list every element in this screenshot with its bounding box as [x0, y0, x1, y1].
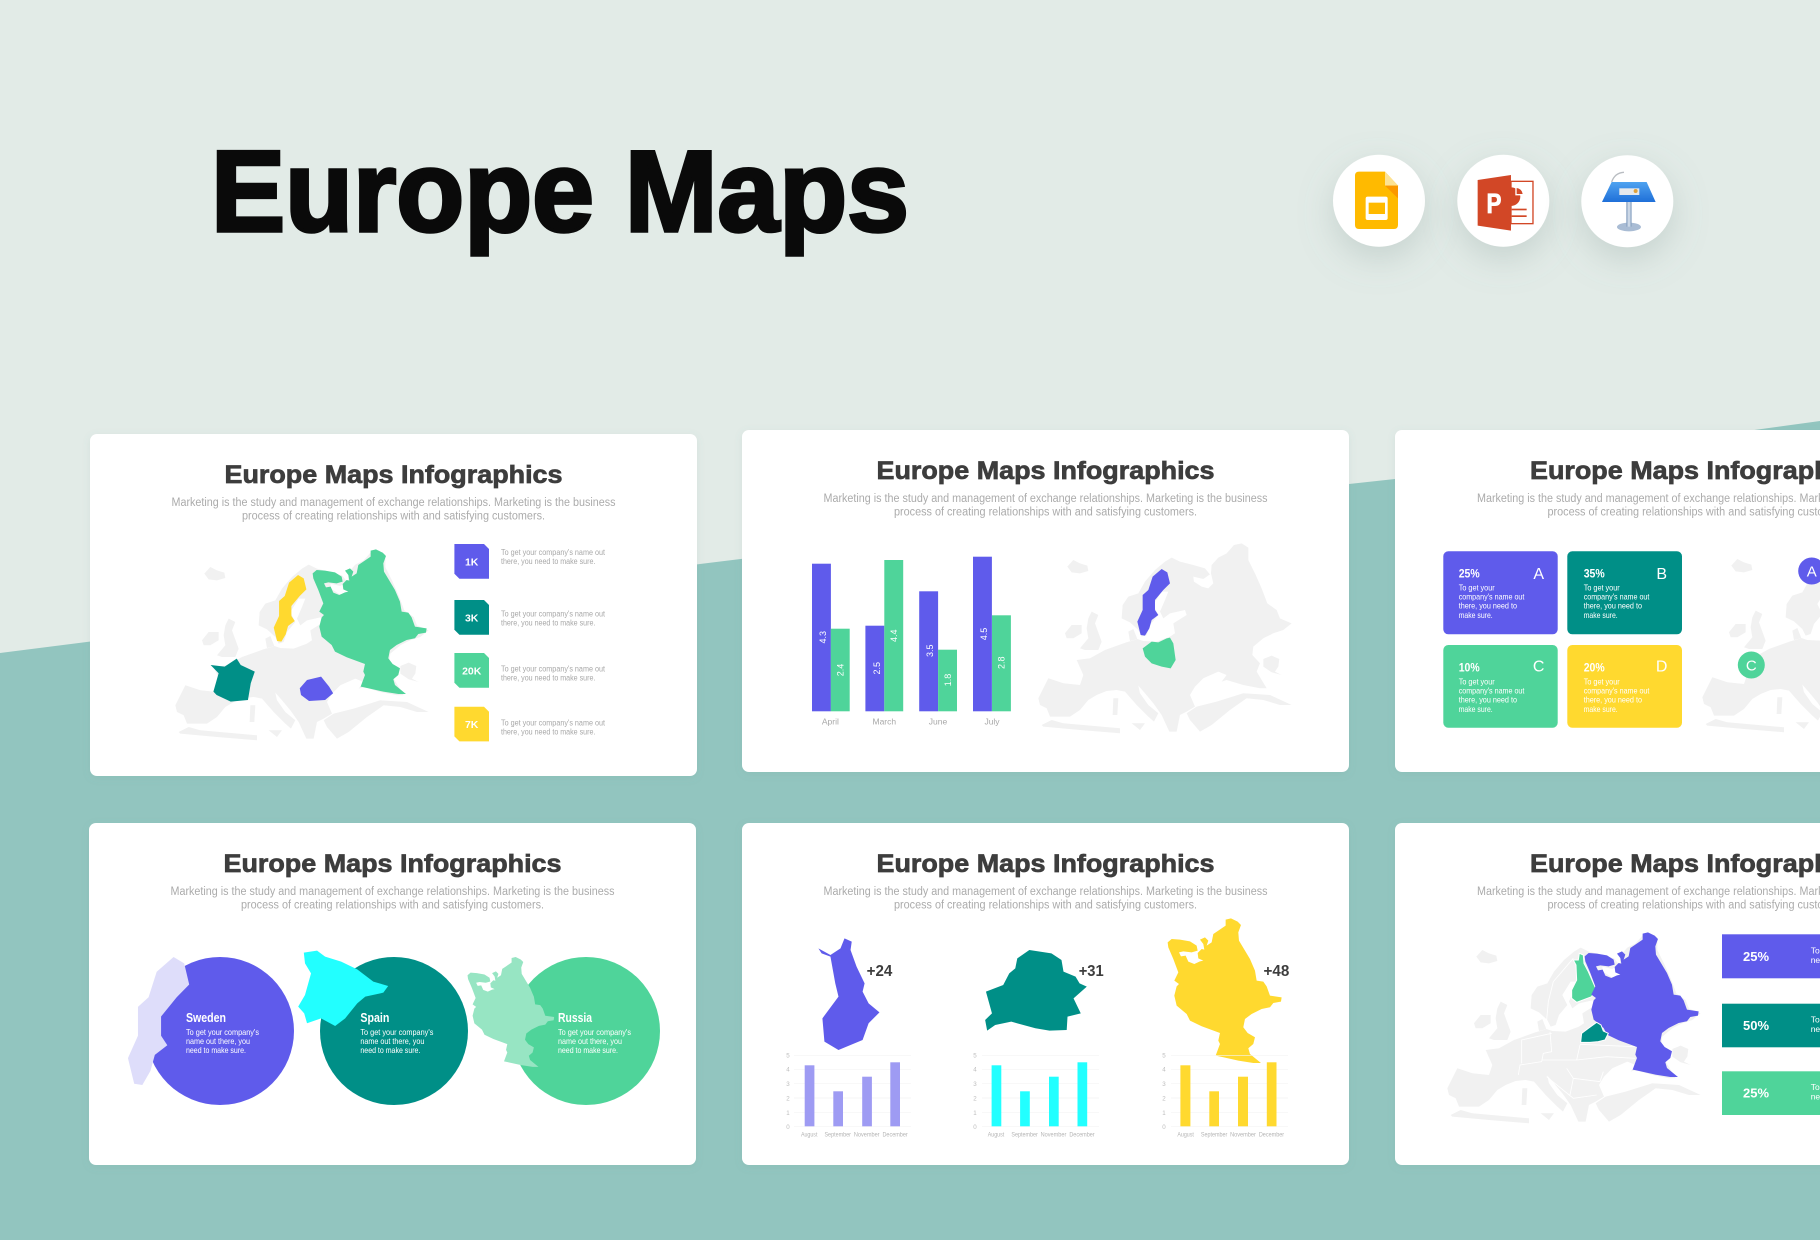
bar chart: 2.8 — [996, 656, 1006, 669]
info card B: To get your — [1584, 582, 1620, 592]
badge row 20K: To get your company's name out — [501, 664, 606, 674]
info card C: company's name out — [1459, 686, 1525, 696]
mini chart 1: 1 — [786, 1110, 790, 1117]
info card A: there, you need to — [1459, 600, 1517, 610]
circle: Spain: need to make sure. — [360, 1045, 420, 1055]
mini chart 3: August — [1177, 1132, 1194, 1138]
map of Europe with highlights — [1447, 932, 1701, 1123]
bar row 50%: 50% — [1743, 1018, 1769, 1033]
info card A: make sure. — [1459, 610, 1493, 620]
mini chart 3: 0 — [1162, 1124, 1166, 1131]
country: Finland — [818, 938, 879, 1050]
info card A: 25% — [1459, 568, 1480, 580]
badge row 7K — [454, 707, 606, 741]
mini chart 1: 3 — [786, 1081, 790, 1088]
map: Sweden highlight — [274, 575, 306, 642]
info card D: there, you need to — [1584, 694, 1642, 704]
badge row 20K: 20K — [462, 666, 482, 678]
info card A — [1443, 551, 1558, 634]
card description: process of creating relationships with and satisfying customers. — [242, 510, 545, 522]
card description — [170, 886, 615, 912]
bar row 25% — [1722, 934, 1820, 978]
badge row 7K: there, you need to make sure. — [501, 728, 595, 736]
mini chart 3: September — [1201, 1132, 1227, 1138]
mini chart 2: September — [1011, 1132, 1038, 1138]
bar chart: 4.4 — [889, 629, 899, 642]
value +31: +31 — [1079, 963, 1104, 980]
mini chart 2: December — [1069, 1132, 1095, 1138]
card description — [172, 497, 616, 522]
mini chart 1: November — [854, 1132, 880, 1138]
circle: Sweden: name out there, you — [186, 1036, 250, 1046]
circle: Sweden — [128, 957, 294, 1105]
mini chart 2: 2 — [973, 1096, 977, 1102]
circle: Russia: need to make sure. — [558, 1045, 618, 1055]
mini chart 2: 0 — [973, 1124, 977, 1131]
mini chart 2: 4 — [973, 1066, 977, 1074]
bar chart: 4.5 — [979, 628, 989, 640]
circle: Spain: Spain — [360, 1010, 389, 1025]
map of Europe — [1038, 543, 1292, 733]
card description: process of creating relationships with and satisfying customers. — [894, 506, 1197, 518]
badge row 7K: To get your company's name out — [501, 718, 606, 728]
card heading: Europe Maps Infographics — [224, 850, 562, 878]
info card D: 20% — [1584, 662, 1605, 674]
panel: map with badges — [90, 434, 697, 776]
map marker A: A — [1807, 564, 1817, 580]
mini chart 2: 1 — [973, 1110, 977, 1117]
panel: countries with mini charts — [742, 823, 1349, 1165]
circle: Sweden: need to make sure. — [186, 1045, 246, 1055]
map: Romania highlight — [300, 677, 333, 701]
info card D: To get your — [1584, 676, 1620, 686]
mini chart 3 — [1162, 1052, 1288, 1138]
bar chart: 3.5 — [925, 644, 935, 657]
mini chart 3: 3 — [1162, 1081, 1166, 1088]
info card C: 10% — [1459, 662, 1480, 674]
bar chart: 2.4 — [836, 664, 846, 676]
country: Belarus — [985, 950, 1087, 1031]
card heading: Europe Maps Infographics — [876, 457, 1214, 485]
info card C: To get your — [1459, 676, 1495, 686]
icon: powerpoint — [1457, 155, 1549, 247]
circle: Sweden: To get your company's — [186, 1027, 259, 1037]
mini chart 3: 4 — [1162, 1066, 1166, 1074]
mini chart 1: December — [882, 1132, 908, 1138]
mini chart 2: August — [988, 1132, 1005, 1138]
map marker C — [1738, 652, 1765, 678]
bar chart: July — [984, 716, 1000, 726]
mini chart 1: 4 — [786, 1066, 790, 1074]
map marker C: C — [1746, 658, 1757, 674]
info card B: make sure. — [1584, 610, 1618, 620]
card heading: Europe Maps Infographics — [876, 850, 1214, 878]
icon: keynote — [1581, 155, 1673, 247]
badge row 20K — [454, 653, 606, 688]
badge row 3K — [454, 600, 606, 635]
main title: Europe Maps — [211, 128, 909, 256]
circle: Spain — [298, 951, 468, 1105]
bar chart — [812, 557, 1011, 726]
bar row 25% lower — [1722, 1071, 1820, 1115]
info card A: To get your — [1459, 582, 1495, 592]
card description — [824, 493, 1268, 518]
mini chart 3: November — [1230, 1132, 1256, 1138]
info card C: there, you need to — [1459, 694, 1517, 704]
info card D: make sure. — [1584, 704, 1618, 714]
country: Russia — [1168, 918, 1282, 1063]
mini chart 1: 5 — [786, 1052, 790, 1060]
bar chart: 1.8 — [943, 674, 953, 686]
mini chart 2: 3 — [973, 1081, 977, 1088]
circle: Spain: name out there, you — [360, 1036, 425, 1046]
circle: Russia: name out there, you — [558, 1036, 622, 1046]
mini chart 1 — [786, 1052, 911, 1138]
mini chart 1: 0 — [786, 1124, 790, 1131]
card description: process of creating relationships with and satisfying customers. — [241, 900, 544, 912]
badge row 1K: 1K — [465, 556, 479, 568]
circle: Spain: To get your company's — [360, 1027, 433, 1037]
info card C: make sure. — [1459, 704, 1493, 714]
card description: Marketing is the study and management of exchange relationships. Marketing is the business — [172, 497, 616, 509]
info card C — [1443, 645, 1558, 728]
badge row 1K — [454, 544, 606, 579]
bar row 25% lower: 25% — [1743, 1086, 1769, 1100]
mini chart 3: 2 — [1162, 1096, 1166, 1102]
map of Europe — [175, 549, 429, 740]
info card C: C — [1533, 659, 1544, 676]
mini chart 2 — [973, 1052, 1099, 1138]
circle: Russia — [468, 957, 660, 1105]
badge row 3K: 3K — [465, 612, 479, 624]
badge row 3K: there, you need to make sure. — [501, 618, 595, 628]
mini chart 1: 2 — [786, 1096, 790, 1102]
badge row 3K: To get your company's name out — [501, 610, 606, 618]
info card A: company's name out — [1459, 592, 1525, 602]
map: France highlight — [211, 659, 255, 702]
card description — [1477, 493, 1820, 518]
bar chart: April — [822, 716, 839, 726]
value +24: +24 — [867, 963, 892, 980]
circle: Russia: Russia — [558, 1010, 593, 1025]
bar chart: June — [929, 716, 947, 726]
card description: process of creating relationships with and satisfying customers. — [894, 900, 1197, 912]
icon: google slides — [1333, 155, 1425, 247]
background teal diagonal band — [0, 421, 1820, 1240]
info card B: B — [1656, 566, 1667, 583]
bar chart: March — [872, 716, 896, 726]
mini chart 3: 5 — [1162, 1052, 1166, 1060]
map marker A — [1798, 558, 1820, 584]
info card B: 35% — [1584, 568, 1605, 580]
bar row 50% — [1722, 1004, 1820, 1047]
card description — [1477, 886, 1820, 912]
mini chart 2: November — [1041, 1132, 1066, 1138]
mini chart 1: August — [801, 1132, 818, 1138]
value +48: +48 — [1264, 963, 1289, 980]
badge row 1K: there, you need to make sure. — [501, 557, 595, 566]
bar row 25%: 25% — [1743, 949, 1769, 964]
circle: Russia: To get your company's — [558, 1027, 631, 1037]
map: Sweden highlight — [1137, 569, 1170, 636]
info card B: there, you need to — [1584, 600, 1642, 610]
card description: Marketing is the study and management of exchange relationships. Marketing is the business — [170, 886, 615, 898]
mini chart 3: 1 — [1162, 1110, 1166, 1117]
badge row 20K: there, you need to make sure. — [501, 674, 595, 682]
badge row 1K: To get your company's name out — [501, 548, 606, 557]
card description: Marketing is the study and management of exchange relationships. Marketing is the business — [824, 886, 1268, 898]
panel: three country circles — [89, 823, 696, 1165]
card description — [824, 886, 1268, 912]
bar chart: 4.3 — [818, 631, 828, 644]
panel: percentage cards and map — [1395, 430, 1820, 772]
map: Poland highlight — [1143, 638, 1176, 668]
map of Europe — [1702, 542, 1820, 732]
info card B: company's name out — [1584, 592, 1650, 602]
card description: Marketing is the study and management of exchange relationships. Marketing is the business — [824, 493, 1268, 505]
badge row 7K: 7K — [465, 719, 479, 731]
info card B — [1567, 551, 1682, 634]
info card D — [1567, 645, 1682, 728]
bar chart: 2.5 — [872, 662, 882, 675]
info card A: A — [1533, 566, 1544, 583]
circle: Sweden: Sweden — [186, 1010, 226, 1025]
mini chart 2: 5 — [973, 1052, 977, 1060]
info card D: D — [1656, 659, 1667, 676]
info card D: company's name out — [1584, 686, 1650, 696]
panel: bar chart and map — [742, 430, 1349, 772]
panel: map with percentage bars — [1395, 823, 1820, 1165]
mini chart 3: December — [1259, 1132, 1284, 1138]
card heading: Europe Maps Infographics — [224, 461, 562, 489]
mini chart 1: September — [824, 1132, 851, 1138]
